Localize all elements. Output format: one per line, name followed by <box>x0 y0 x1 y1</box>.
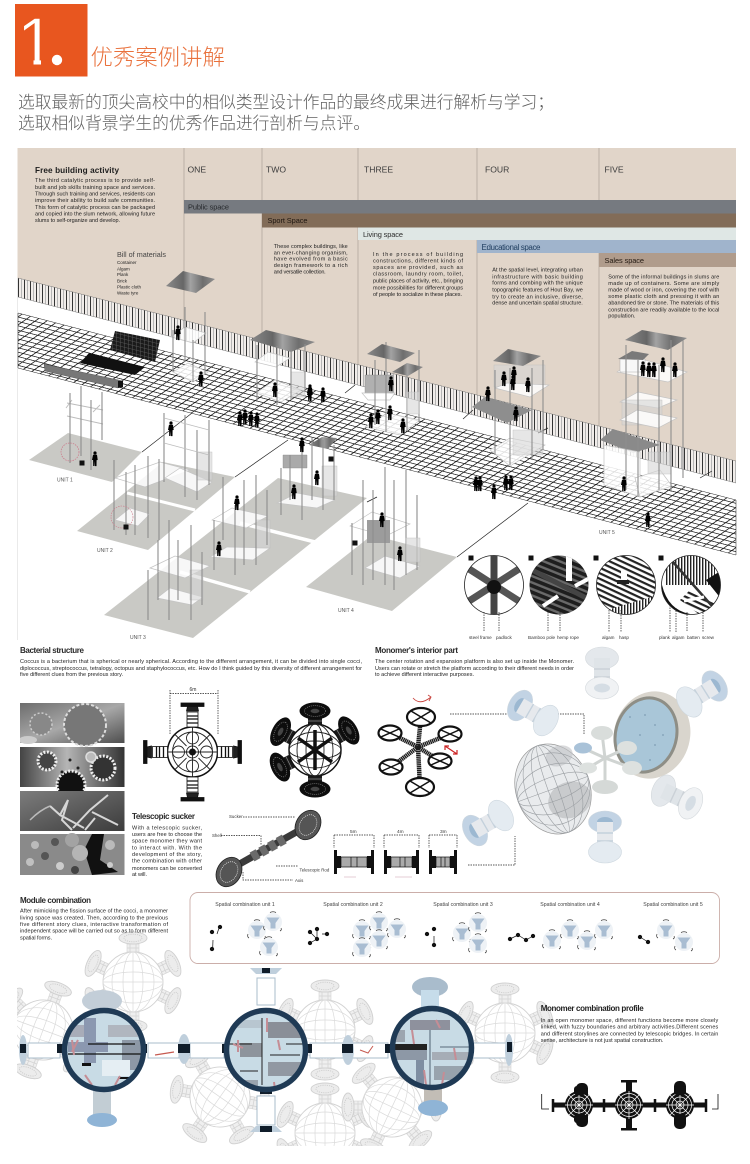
text: stage five: construction are readily available to the local <box>608 307 719 313</box>
telescopic sucker diagram <box>211 806 330 891</box>
material labels: algam <box>672 635 685 640</box>
text: stage two: have evolved from a basic <box>274 256 348 262</box>
unit 4 scaffold <box>350 467 420 590</box>
photo 2 <box>20 747 124 791</box>
text: telescopic sucker: development of the story, <box>132 852 202 858</box>
text: stage four: At the spatial level, integrating urban <box>492 268 583 274</box>
length variants: 5m 4m 3m: 3m <box>440 829 447 835</box>
text: monomer's interior part <box>375 646 574 678</box>
text: bill of materials: Plastic cloth <box>117 284 142 289</box>
detail circles <box>464 555 722 640</box>
text: free building activity: improve their ability to build safe communities. <box>35 198 155 204</box>
text: bacterial structure: Coccus is a bacterium that is spherical or nearly spherical. According to the different arrangement, it can be divided into single cocci, <box>20 659 362 665</box>
text: monomer combination profile: and different storylines are connected by telescopic bridges. In certain <box>541 1031 718 1037</box>
text: stage five <box>608 274 720 320</box>
text: stage two: and versatile collection. <box>274 270 326 276</box>
unit captions: Spatial combination unit 5 <box>643 902 703 908</box>
space bars: Educational space <box>482 243 541 252</box>
orange number badge <box>15 4 88 80</box>
text: monomer combination profile: Monomer combination profile <box>541 1004 644 1013</box>
material labels: screw <box>702 635 715 640</box>
text: free building activity: slums to self-organize and develop. <box>35 218 120 224</box>
panel: beige timeline header <box>18 148 736 461</box>
photo 3 <box>20 791 124 831</box>
intro text <box>18 93 554 133</box>
text: stage five: some plastic cloth and pressing it with an <box>608 294 719 300</box>
material labels: padlock <box>496 635 513 640</box>
mini monomer plans <box>248 912 693 957</box>
text: bill of materials: Bill of materials <box>117 250 166 259</box>
text: stage three: In the process of building <box>373 252 463 258</box>
intro text: 选取相似背景学生的优秀作品进行剖析与点评。 <box>18 114 370 133</box>
wire sphere <box>502 733 604 845</box>
space bars: Sport Space <box>268 216 308 225</box>
text: telescopic sucker: With a telescopic sucker, <box>132 825 202 831</box>
text: free building activity: and copied into the slum network, allowing future <box>35 212 155 218</box>
bottom margin mask <box>0 960 750 1164</box>
stage labels: ONE <box>188 164 206 174</box>
section circle 1 <box>64 1010 144 1090</box>
length variants: 5m 4m 3m: 4m <box>397 829 404 835</box>
center platform <box>574 726 642 794</box>
text: monomer combination profile: linked, with fuzzy boundaries and arbitrary activities.Different scenes <box>541 1024 719 1030</box>
stage labels: THREE <box>364 164 393 174</box>
text: stage three: spaces are provided, such as <box>373 265 463 271</box>
material labels: algam <box>602 635 615 640</box>
text: monomer's interior part: Users can rotate or stretch the platform according to their different needs in order <box>375 666 574 672</box>
roof: stage one <box>166 271 215 293</box>
driveway lines <box>142 385 712 557</box>
telescopic sucker diagram: Telescopic Rod <box>300 868 330 872</box>
stage labels: TWO <box>266 164 286 174</box>
node diagrams <box>210 925 650 951</box>
text: module combination <box>20 896 168 942</box>
detail 4: plank <box>658 555 722 620</box>
unit captions: Spatial combination unit 1 <box>215 902 275 908</box>
background wireframe monomers <box>0 932 556 1164</box>
photo 4 <box>20 833 124 875</box>
material labels: batten <box>687 635 700 640</box>
unit captions <box>215 902 703 908</box>
perspective view of monomer <box>266 702 364 798</box>
suckers behind circles <box>82 977 448 1127</box>
text: stage four: topographic features of Hout Bay, we <box>492 288 583 294</box>
text: stage five: made of wood or iron, covering the roof with <box>608 288 719 294</box>
text: stage three: more possibilities for different groups <box>373 285 463 291</box>
red arrows <box>413 695 431 702</box>
text: module combination: Module combination <box>20 896 91 905</box>
text: bill of materials <box>117 250 166 296</box>
space bars: Living space <box>363 230 403 239</box>
text: bill of materials: Plank <box>117 272 129 277</box>
text: bill of materials: Waste tyre <box>117 290 139 296</box>
unit labels: UNIT 4 <box>338 608 354 614</box>
materials on street <box>44 331 160 388</box>
structure: stage five <box>600 330 687 527</box>
length variants: 5m 4m 3m: 5m <box>350 829 357 835</box>
text: bill of materials: Brick <box>117 278 128 283</box>
unit 3 scaffold <box>148 437 337 620</box>
unit plates <box>29 433 457 638</box>
text: free building activity: Through such training and services, residents can <box>35 192 155 198</box>
text: module combination: living space was created. Then, according to the previous <box>20 915 168 921</box>
text: telescopic sucker: the combination with other <box>132 859 202 865</box>
intro text: 选取最新的顶尖高校中的相似类型设计作品的最终成果进行解析与学习； <box>18 93 554 112</box>
text: module combination: independent space will be carried out so as to form different <box>20 929 168 935</box>
rotating platform <box>378 695 462 796</box>
telescopic sucker diagram: Sucker <box>229 814 243 819</box>
fence <box>18 278 736 483</box>
paved street <box>18 313 736 555</box>
text: bacterial structure: five different clues from the previous story. <box>20 672 123 678</box>
text: bacterial structure <box>20 646 362 678</box>
connector lines <box>450 714 584 865</box>
text: stage four: forms and combing with the unique <box>492 281 583 287</box>
text: stage two: an ever-changing organism, <box>274 250 348 256</box>
text: monomer's interior part: to achieve different interactive purposes. <box>375 672 474 678</box>
text: stage four: try to create an inclusive, diverse, <box>492 294 583 300</box>
material labels: steel frame <box>469 635 492 640</box>
telescopic sucker diagram: Axis <box>295 878 304 883</box>
text: telescopic sucker: at will. <box>132 872 147 878</box>
section heading: 优秀案例讲解 <box>90 45 225 70</box>
material labels: plank <box>659 635 671 640</box>
text: free building activity: This form of catalytic process can be packaged <box>35 205 155 211</box>
unit captions: Spatial combination unit 2 <box>323 902 383 908</box>
structure: stage three <box>362 342 423 435</box>
detail 2: bamboo pole <box>528 555 590 614</box>
photo 1 <box>19 703 124 746</box>
text: stage three: constructions, different kinds of <box>373 259 463 265</box>
space bars <box>184 200 736 267</box>
text: monomer's interior part: Monomer's interior part <box>375 646 458 655</box>
structure: stage two <box>237 330 326 427</box>
panel: spatial combination units <box>190 892 720 964</box>
structure: stage one <box>171 307 208 386</box>
stage labels <box>188 164 624 174</box>
orange number badge: . <box>49 10 66 77</box>
leader lines <box>484 605 703 632</box>
dimension: 6m <box>170 687 218 735</box>
detail 3: algam <box>594 556 656 620</box>
text: stage three: of people to socialize in these places. <box>373 292 462 298</box>
text: telescopic sucker: Telescopic sucker <box>132 812 195 821</box>
text: module combination: spatial forms. <box>20 936 52 942</box>
text: free building activity: Free building activity <box>35 166 119 175</box>
text: monomer combination profile: In an open monomer space, different functions become more closely <box>541 1018 719 1024</box>
text: stage five: Some of the informal buildings in slums are <box>608 274 719 280</box>
text: stage five: population. <box>608 314 636 320</box>
text: module combination: five different story clues, interactive transformation of <box>20 922 168 928</box>
text: telescopic sucker: space monomer they want <box>132 839 202 845</box>
section circle 3 <box>392 1008 472 1088</box>
text: stage three: public places of activity, etc., bringing <box>373 279 463 285</box>
text: stage two: These complex buildings, like <box>274 244 348 250</box>
text: telescopic sucker: monomers can be converted <box>132 866 202 872</box>
text: stage three: classroom, laundry room, toilet, <box>373 272 463 278</box>
material labels: hasp <box>619 635 629 640</box>
text: stage four <box>492 268 583 307</box>
bridges <box>19 968 513 1132</box>
structure: stage four <box>472 349 549 499</box>
text: monomer combination profile <box>541 1004 719 1044</box>
section circle 2 <box>226 1010 306 1090</box>
unit 1 scaffold <box>61 386 103 470</box>
text: monomer combination profile: sense, architecture is not just spatial construction. <box>541 1038 664 1044</box>
unit labels: UNIT 1 <box>57 478 73 484</box>
unit captions: Spatial combination unit 3 <box>433 902 493 908</box>
black profile drawing <box>542 1080 718 1130</box>
text: telescopic sucker: users are free to choose the <box>132 832 202 838</box>
stage labels: FIVE <box>604 164 624 174</box>
material labels: Bamboo pole <box>528 635 556 640</box>
length variants: 5m 4m 3m <box>334 829 457 877</box>
orange number badge: 1 <box>17 4 55 80</box>
text: bill of materials: Algam <box>117 266 130 272</box>
stage labels: FOUR <box>485 164 509 174</box>
text: monomer's interior part: The center rotation and expansion platform is also set up inside the Monomer. <box>375 659 574 665</box>
material labels: hemp rope <box>557 635 579 640</box>
unit captions: Spatial combination unit 4 <box>540 902 600 908</box>
unit 2 scaffold <box>111 413 212 540</box>
unit labels: UNIT 2 <box>97 548 113 554</box>
text: bacterial structure: Bacterial structure <box>20 646 85 655</box>
text: bill of materials: Container <box>117 260 137 265</box>
text: stage two: design framework to a rich <box>274 263 348 269</box>
text: stage three <box>373 252 463 298</box>
text: free building activity: built and job skills training space and services. <box>35 185 155 191</box>
text: telescopic sucker <box>132 812 202 878</box>
front view of monomer <box>144 703 242 801</box>
text: stage four: infrastructure with basic building <box>492 274 583 280</box>
text: stage four: dense and uncertain spatial structure. <box>492 301 583 307</box>
text: telescopic sucker: to interact with. With the <box>132 845 202 851</box>
text: stage two <box>274 244 348 276</box>
left frame line <box>16 278 18 640</box>
dimension: 6m: 6m <box>190 687 196 693</box>
space bars: Public space <box>188 202 229 212</box>
text: bacterial structure: diplococcus, streptococcus, tetralogy, octopus and staphylococcus, etc. How do I think guided by this diversity of different arrangement for <box>20 666 362 672</box>
half shell <box>604 683 700 787</box>
space bars: Sales space <box>604 256 644 265</box>
suckers <box>586 647 618 699</box>
text: free building activity <box>35 166 155 224</box>
text: stage five: abandoned tire or stone. The materials of this <box>608 300 720 306</box>
material labels <box>469 635 715 640</box>
text: free building activity: The third catalytic process is to provide self- <box>35 178 155 184</box>
text: module combination: After mimicking the fission surface of the cocci, a monomer <box>20 909 168 915</box>
unit labels: UNIT 3 <box>130 635 146 641</box>
detail 1: steel frame <box>464 555 524 615</box>
unit labels: UNIT 5 <box>599 530 615 536</box>
bacteria photos <box>19 703 124 875</box>
telescopic sucker diagram: Shell <box>212 833 222 838</box>
unit labels <box>57 478 615 641</box>
text: stage five: made up of containers. Some are simply <box>608 281 720 287</box>
section monomer chain <box>19 968 513 1132</box>
exploded monomer <box>450 647 733 865</box>
